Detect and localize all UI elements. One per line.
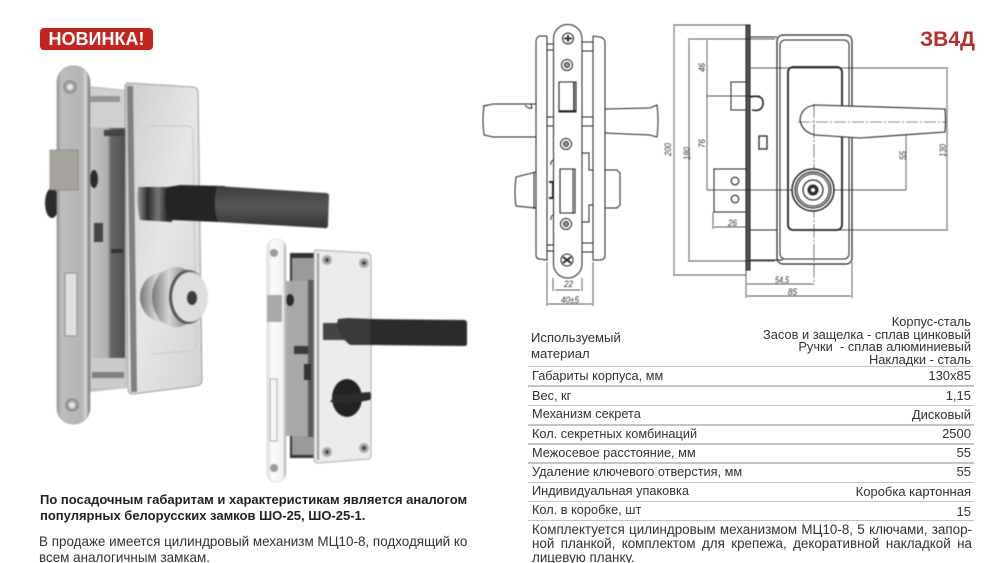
row: box quantity: Кол. в коробке, шт [532,502,641,517]
bold compatibility note: По посадочным габаритам и характеристикам является аналогом [40,492,467,507]
row: material [531,330,621,361]
spindle stub [45,188,59,218]
specifications table: 55 [957,445,971,460]
specifications table: Коробка картонная [856,484,971,499]
dimension labels: side view: 200 [663,143,673,157]
dimension labels: side view: 85 [788,287,798,297]
bold compatibility note [40,492,467,523]
escutcheon [777,35,852,264]
kit description [532,522,972,563]
back plate [746,25,750,270]
row: combinations: Кол. секретных комбинаций [532,426,697,441]
specifications table: 1,15 [946,388,971,403]
specifications table: 130х85 [928,368,971,383]
thumb [515,172,536,209]
handle [137,185,329,228]
photo: large lock [45,66,329,424]
specifications table: Дисковый [912,407,971,422]
right escutcheon [593,36,605,260]
cylinder [140,267,208,327]
model number: ЗВ4Д [920,28,975,51]
cylinder availability note: В продаже имеется цилиндровый механизм МЦ10-8, подходящий ко [39,534,467,549]
row: material: материал [531,346,590,361]
specifications table: Ручки - сплав алюминиевый [798,339,971,354]
cylinder availability note [39,534,467,563]
kit description: ной планкой, комплектом для крепежа, декоративной накладкой на [532,536,972,551]
faceplate [57,66,90,424]
row: material: Используемый [531,330,621,345]
row: weight: Вес, кг [532,388,571,403]
badge: new product: НОВИНКА! [49,29,144,49]
dimension labels: side view: 76 [697,139,707,148]
thumbturn [330,379,371,417]
bolt [731,82,746,110]
left escutcheon [536,36,547,260]
row: key offset: Удаление ключевого отверстия, мм [532,464,742,479]
specifications table: Накладки - сталь [869,352,971,367]
dimension labels: side view [663,63,948,297]
specifications table: 55 [957,464,971,479]
dimension labels: side view: 54,5 [775,275,790,285]
right handle [605,105,658,137]
dimension labels: front view: 40±5 [561,295,580,305]
row: axis distance: Межосевое расстояние, мм [532,445,696,460]
escutcheon [125,83,202,394]
photo: small lock [267,239,467,482]
specifications table: 15 [957,504,971,519]
specifications table: Засов и защелка - сплав цинковый [763,327,971,342]
dimension labels: side view: 180 [682,147,692,160]
lock body [88,86,127,392]
body bars [547,42,593,252]
row: mechanism: Механизм секрета [532,406,641,421]
dimension labels: front view [561,279,580,305]
left handle [483,104,536,137]
cylinder [792,169,834,211]
dimensions [547,262,593,306]
inner plate [788,67,842,230]
handle [800,105,946,138]
kit description: Комплектуется цилиндровым механизмом МЦ10-8, 5 ключами, запор- [532,522,972,537]
dimension labels: side view: 46 [697,63,707,72]
row: packaging: Индивидуальная упаковка [532,483,689,498]
dimension lines [673,25,948,298]
faceplate [554,24,582,278]
bold compatibility note: популярных белорусских замков ШО-25, ШО-25-1. [40,508,365,523]
body lines [750,37,783,260]
row: size: Габариты корпуса, мм [532,368,663,383]
dimension labels: side view: 55 [898,150,908,160]
specifications table: Корпус-сталь [892,314,971,329]
dimension labels: side view: 26 [727,218,737,228]
latch [50,150,78,190]
dimension labels: side view: 130 [938,144,948,157]
specifications table: 2500 [942,426,971,441]
small handle [323,318,467,346]
dimension labels: front view: 22 [563,279,573,289]
